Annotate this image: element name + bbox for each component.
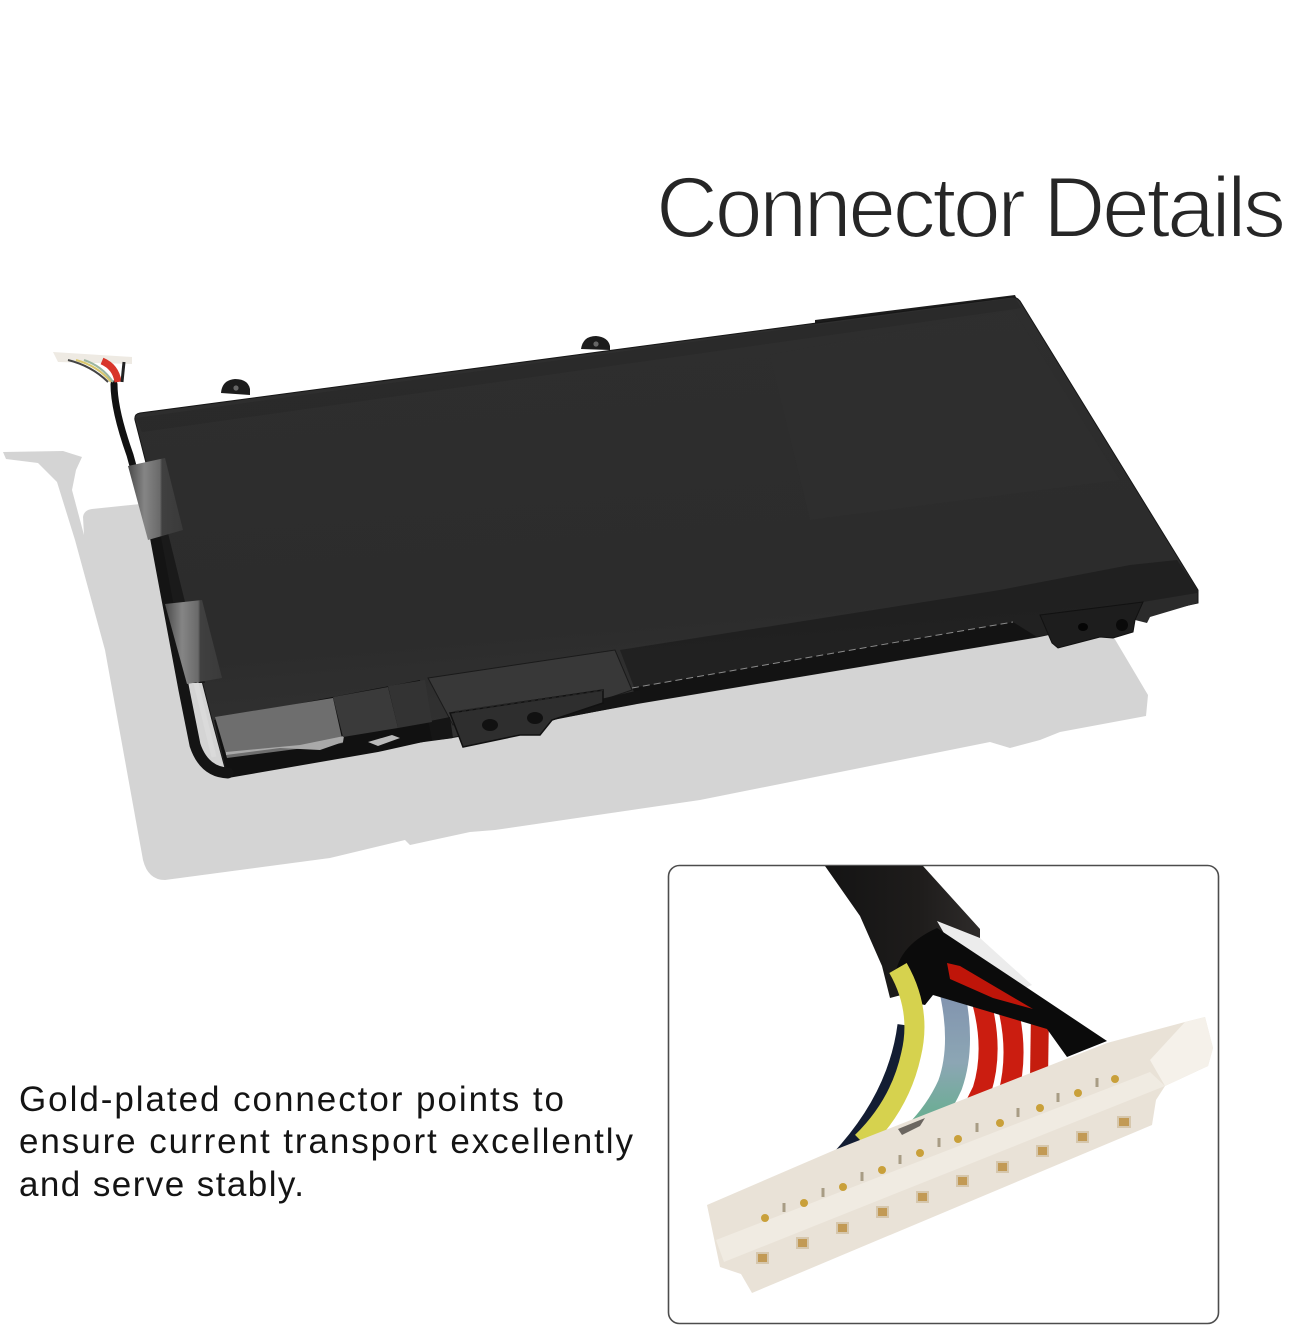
white plastic connector <box>707 1017 1213 1293</box>
lower clip left <box>420 650 640 747</box>
tape 3 <box>215 698 343 758</box>
lower clip right <box>1040 593 1197 648</box>
dark edge strip <box>620 560 1198 703</box>
lower contact pins <box>757 1117 1130 1263</box>
mounting tabs on top edge <box>221 295 1018 395</box>
tape 2 <box>165 600 222 684</box>
description text: ensure current transport excellently <box>19 1122 634 1161</box>
yellow wire <box>862 968 914 1142</box>
small connector <box>53 352 132 382</box>
white wire strip <box>196 683 214 757</box>
battery pack <box>135 295 1198 768</box>
tape 4 <box>333 687 398 737</box>
dark band beside body <box>150 533 205 683</box>
compartment ticks <box>784 1078 1097 1212</box>
black sleeve <box>825 866 980 998</box>
dashed seam <box>632 622 1013 688</box>
description text: and serve stably. <box>19 1165 304 1204</box>
battery cast shadow <box>3 400 1148 880</box>
lower wrap <box>214 680 432 778</box>
battery cable <box>114 384 152 535</box>
cable and tapes <box>53 352 432 778</box>
tape 5 <box>388 680 432 728</box>
description text <box>19 1080 634 1204</box>
foil <box>368 735 400 746</box>
tape 1 <box>128 458 183 540</box>
connector detail panel <box>668 866 1218 1324</box>
connector wires behind bundle <box>840 975 1040 1155</box>
upper contact pins <box>761 1075 1119 1222</box>
description text: Gold-plated connector points to <box>19 1080 564 1119</box>
fold panel shading <box>770 310 1120 520</box>
wire bundle <box>895 921 1107 1057</box>
title: Connector Details <box>656 160 1286 256</box>
battery body <box>135 297 1198 768</box>
